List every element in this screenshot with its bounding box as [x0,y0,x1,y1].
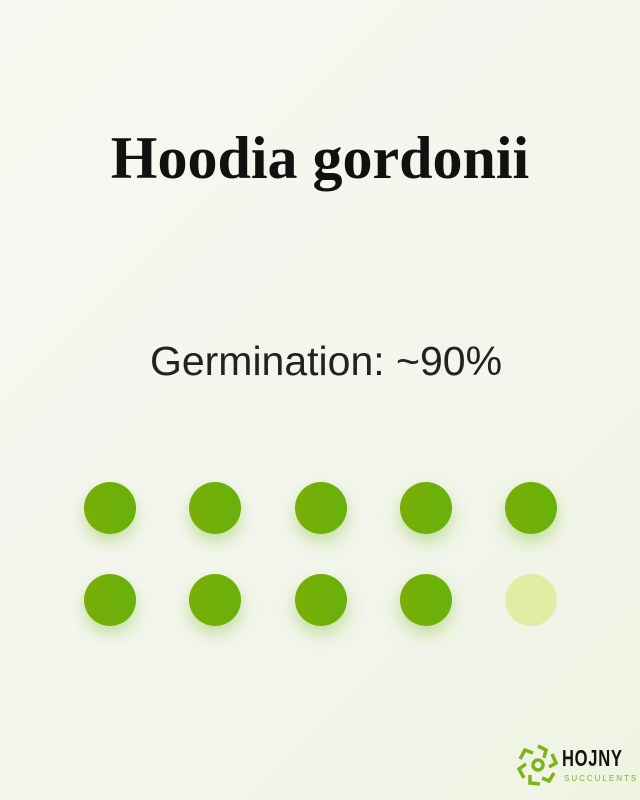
title: Hoodia gordonii [111,125,529,191]
logo text: HOJNY [562,745,623,771]
icon: flower [516,744,558,786]
subtitle: germination rate: Germination: ~90% [150,338,502,384]
logo: Hojny Succulents [516,744,638,786]
logo: Hojny Succulents: SUCCULENTS [564,774,638,783]
dot grid: 9 of 10 germinated [75,481,566,643]
